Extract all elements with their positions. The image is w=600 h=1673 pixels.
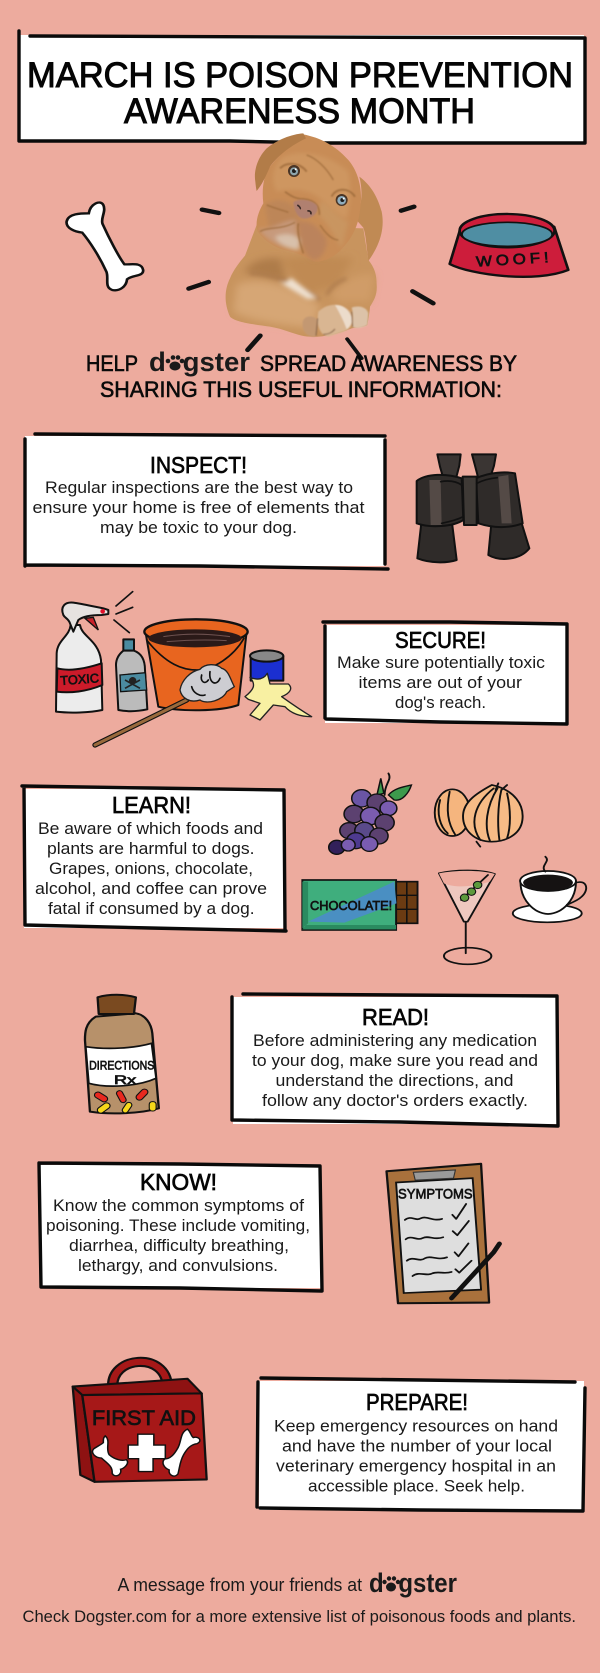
icon: first aid kit: FIRST AID: [92, 1406, 196, 1430]
icon: coffee cup: [513, 857, 586, 922]
icon: bone: [67, 203, 143, 290]
text: know body: poisoning. These include vomiting,: [46, 1216, 310, 1235]
icon: medicine bottle: DIRECTIONS: [89, 1058, 155, 1072]
text: read body: to your dog, make sure you read and: [252, 1051, 538, 1070]
text: learn body: plants are harmful to dogs.: [47, 839, 254, 858]
head: [257, 134, 361, 262]
icon: first aid kit: [73, 1362, 207, 1482]
text: know body: [46, 1196, 310, 1275]
mop: [95, 665, 234, 745]
heading: inspect: INSPECT!: [150, 452, 247, 478]
icon: grapes: [329, 773, 411, 854]
icon: chocolate bar: CHOCOLATE!: [310, 899, 392, 913]
subtitle: [86, 347, 517, 402]
heading: know: KNOW!: [140, 1169, 217, 1195]
text: read body: Before administering any medication: [253, 1031, 537, 1050]
text: know body: lethargy, and convulsions.: [78, 1256, 278, 1275]
text: learn body: alcohol, and coffee can prove: [35, 879, 267, 898]
icon: chocolate bar: [302, 880, 418, 930]
logo: dogster: dogster: [149, 347, 250, 377]
footer note: Check Dogster.com for a more extensive list of poisonous foods and plants.: [22, 1607, 576, 1626]
text: learn body: fatal if consumed by a dog.: [48, 899, 254, 918]
text: prepare body: accessible place. Seek help.: [308, 1476, 525, 1496]
icon: symptoms clipboard: [387, 1164, 499, 1303]
text: read body: understand the directions, and: [276, 1071, 514, 1090]
icon: martini glass: [439, 870, 495, 964]
can and spill: [245, 650, 312, 720]
text: know body: Know the common symptoms of: [53, 1196, 304, 1215]
eyes: [288, 165, 300, 177]
panel: learn: [22, 786, 286, 931]
text: prepare body: and have the number of your local: [282, 1436, 552, 1456]
heading: prepare: PREPARE!: [366, 1389, 468, 1415]
footer message: [118, 1568, 457, 1598]
dog body: [226, 225, 377, 337]
heading: learn: LEARN!: [112, 792, 191, 818]
right ear: [355, 177, 383, 261]
bucket: [144, 619, 248, 710]
text: learn body: [35, 819, 267, 918]
text: learn body: Grapes, onions, chocolate,: [49, 859, 253, 878]
heading: secure: SECURE!: [395, 627, 486, 653]
heading: read: READ!: [362, 1004, 429, 1030]
icon: onions: [435, 783, 523, 847]
left ear: [255, 133, 306, 191]
text: inspect body: ensure your home is free of elements that: [32, 498, 365, 517]
paws: [303, 305, 368, 337]
title: MARCH IS POISON PREVENTION: [27, 56, 573, 95]
footer message: A message from your friends at: [118, 1575, 362, 1595]
icon: binoculars: [417, 454, 529, 562]
icon: dog bowl: [450, 214, 568, 277]
text: prepare body: veterinary emergency hospital in an: [276, 1456, 556, 1476]
icon: dog bowl: WOOF!: [475, 250, 549, 270]
panel: prepare: [257, 1378, 585, 1511]
text: secure body: Make sure potentially toxic: [337, 653, 546, 672]
icon: symptoms clipboard: SYMPTOMS: [398, 1186, 473, 1202]
text: learn body: Be aware of which foods and: [38, 819, 263, 838]
text: prepare body: Keep emergency resources on hand: [274, 1416, 558, 1436]
icon: medicine bottle: [85, 995, 159, 1114]
title: AWARENESS MONTH: [124, 92, 475, 131]
title: [19, 31, 585, 143]
text: secure body: dog's reach.: [395, 693, 486, 712]
panel: read: [232, 994, 558, 1126]
text: inspect body: Regular inspections are the best way to: [45, 478, 353, 497]
panel: secure: [323, 622, 567, 724]
panel: inspect: [25, 434, 388, 569]
logo: dogster footer: dogster: [369, 1568, 457, 1598]
spray bottle: TOXIC: [60, 671, 99, 688]
subtitle: SPREAD AWARENESS BY: [260, 351, 517, 376]
icon: puppy photo: [226, 133, 383, 337]
subtitle: HELP: [86, 351, 138, 376]
spray lines: [114, 592, 133, 633]
text: read body: [252, 1031, 538, 1110]
icon: toxic cleaning supplies: [56, 592, 312, 745]
small poison bottle: [116, 639, 147, 711]
subtitle: SHARING THIS USEFUL INFORMATION:: [100, 377, 502, 402]
icon: medicine bottle: Rx: [114, 1073, 137, 1087]
text: secure body: [337, 653, 546, 712]
text: inspect body: may be toxic to your dog.: [100, 518, 297, 537]
nose: [293, 200, 317, 219]
text: secure body: items are out of your: [358, 673, 522, 692]
text: read body: follow any doctor's orders exactly.: [262, 1091, 528, 1110]
text: inspect body: [32, 478, 365, 537]
spray bottle: [56, 603, 108, 713]
icon: attention ticks around dog: [189, 207, 433, 358]
panel: know: [39, 1163, 322, 1291]
text: prepare body: [274, 1416, 558, 1496]
text: know body: diarrhea, difficulty breathing,: [69, 1236, 289, 1255]
